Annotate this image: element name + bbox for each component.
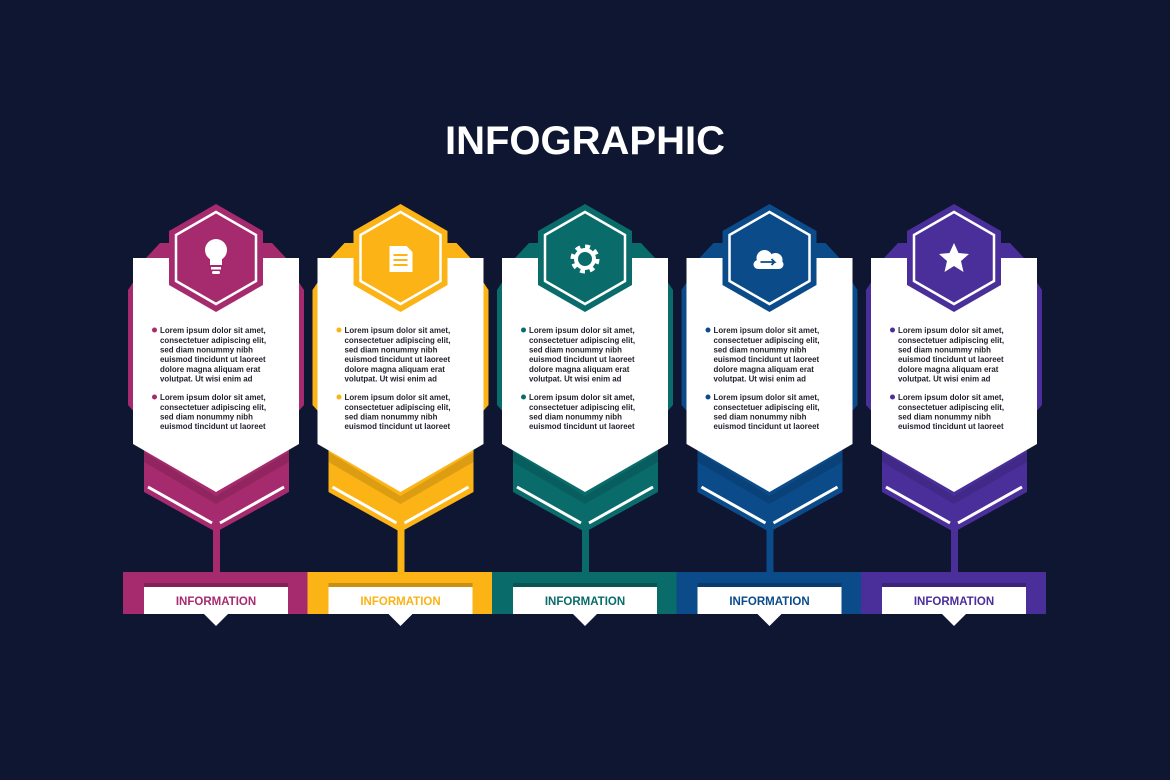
icon: document xyxy=(390,246,412,272)
text block: Lorem ipsum dolor sit amet, xyxy=(160,393,266,402)
icon: light bulb xyxy=(205,239,227,274)
text block: Lorem ipsum dolor sit amet, xyxy=(344,326,450,335)
text block xyxy=(706,326,820,431)
text block: consectetuer adipiscing elit, xyxy=(160,403,266,412)
text block: euismod tincidunt ut laoreet xyxy=(714,355,820,364)
text block: euismod tincidunt ut laoreet xyxy=(160,355,266,364)
text block: sed diam nonummy nibh xyxy=(529,412,622,422)
panel: column 2 xyxy=(308,204,492,626)
text block: consectetuer adipiscing elit, xyxy=(160,336,266,345)
text block: sed diam nonummy nibh xyxy=(529,346,622,354)
title: INFOGRAPHIC xyxy=(445,119,725,163)
text block: volutpat. Ut wisi enim ad xyxy=(344,374,437,384)
text block: volutpat. Ut wisi enim ad xyxy=(529,374,622,384)
label: INFORMATION xyxy=(914,596,994,608)
text block: Lorem ipsum dolor sit amet, xyxy=(160,326,266,335)
text block: sed diam nonummy nibh xyxy=(160,346,253,354)
text block: consectetuer adipiscing elit, xyxy=(898,403,1004,412)
label: INFORMATION xyxy=(360,596,441,608)
label: INFORMATION xyxy=(176,596,256,608)
panel: column 4 xyxy=(676,204,862,626)
panel: column 3 xyxy=(492,204,677,626)
label: INFORMATION xyxy=(545,596,625,608)
text block: consectetuer adipiscing elit, xyxy=(714,336,820,345)
text block: volutpat. Ut wisi enim ad xyxy=(160,374,253,384)
text block: sed diam nonummy nibh xyxy=(898,412,991,422)
text block: euismod tincidunt ut laoreet xyxy=(898,422,1004,431)
icon: star xyxy=(939,243,969,272)
text block: volutpat. Ut wisi enim ad xyxy=(898,374,991,384)
text block: Lorem ipsum dolor sit amet, xyxy=(529,393,635,402)
text block: consectetuer adipiscing elit, xyxy=(344,336,451,345)
text block: euismod tincidunt ut laoreet xyxy=(529,355,635,364)
text block: dolore magna aliquam erat xyxy=(160,365,261,374)
panel: column 1 xyxy=(123,204,308,626)
text block: euismod tincidunt ut laoreet xyxy=(529,422,635,431)
text block: dolore magna aliquam erat xyxy=(529,365,630,374)
text block: consectetuer adipiscing elit, xyxy=(898,336,1004,345)
text block: dolore magna aliquam erat xyxy=(344,365,445,374)
panel: column 5 xyxy=(861,204,1046,626)
text block xyxy=(336,326,451,431)
text block: consectetuer adipiscing elit, xyxy=(714,403,820,412)
text block: sed diam nonummy nibh xyxy=(344,412,438,422)
text block xyxy=(152,326,266,431)
text block: euismod tincidunt ut laoreet xyxy=(160,422,266,431)
text block: consectetuer adipiscing elit, xyxy=(344,403,451,412)
text block: sed diam nonummy nibh xyxy=(160,412,253,422)
text block: Lorem ipsum dolor sit amet, xyxy=(714,393,819,402)
text block: Lorem ipsum dolor sit amet, xyxy=(714,326,819,335)
text block: Lorem ipsum dolor sit amet, xyxy=(529,326,635,335)
text block: sed diam nonummy nibh xyxy=(714,346,807,354)
text block: sed diam nonummy nibh xyxy=(898,346,991,354)
text block xyxy=(521,326,635,431)
text block: Lorem ipsum dolor sit amet, xyxy=(344,393,450,402)
text block xyxy=(890,326,1004,431)
label: INFORMATION xyxy=(729,596,810,608)
text block: sed diam nonummy nibh xyxy=(714,412,807,422)
text block: dolore magna aliquam erat xyxy=(898,365,999,374)
text block: Lorem ipsum dolor sit amet, xyxy=(898,326,1004,335)
text block: volutpat. Ut wisi enim ad xyxy=(714,374,806,384)
text block: sed diam nonummy nibh xyxy=(344,346,438,354)
text block: euismod tincidunt ut laoreet xyxy=(898,355,1004,364)
text block: euismod tincidunt ut laoreet xyxy=(344,355,451,364)
text block: consectetuer adipiscing elit, xyxy=(529,403,635,412)
text block: consectetuer adipiscing elit, xyxy=(529,336,635,345)
text block: dolore magna aliquam erat xyxy=(714,365,814,374)
text block: euismod tincidunt ut laoreet xyxy=(344,422,451,431)
text block: euismod tincidunt ut laoreet xyxy=(714,422,820,431)
text block: Lorem ipsum dolor sit amet, xyxy=(898,393,1004,402)
icon: cloud xyxy=(754,250,784,269)
icon: gear xyxy=(574,248,596,270)
